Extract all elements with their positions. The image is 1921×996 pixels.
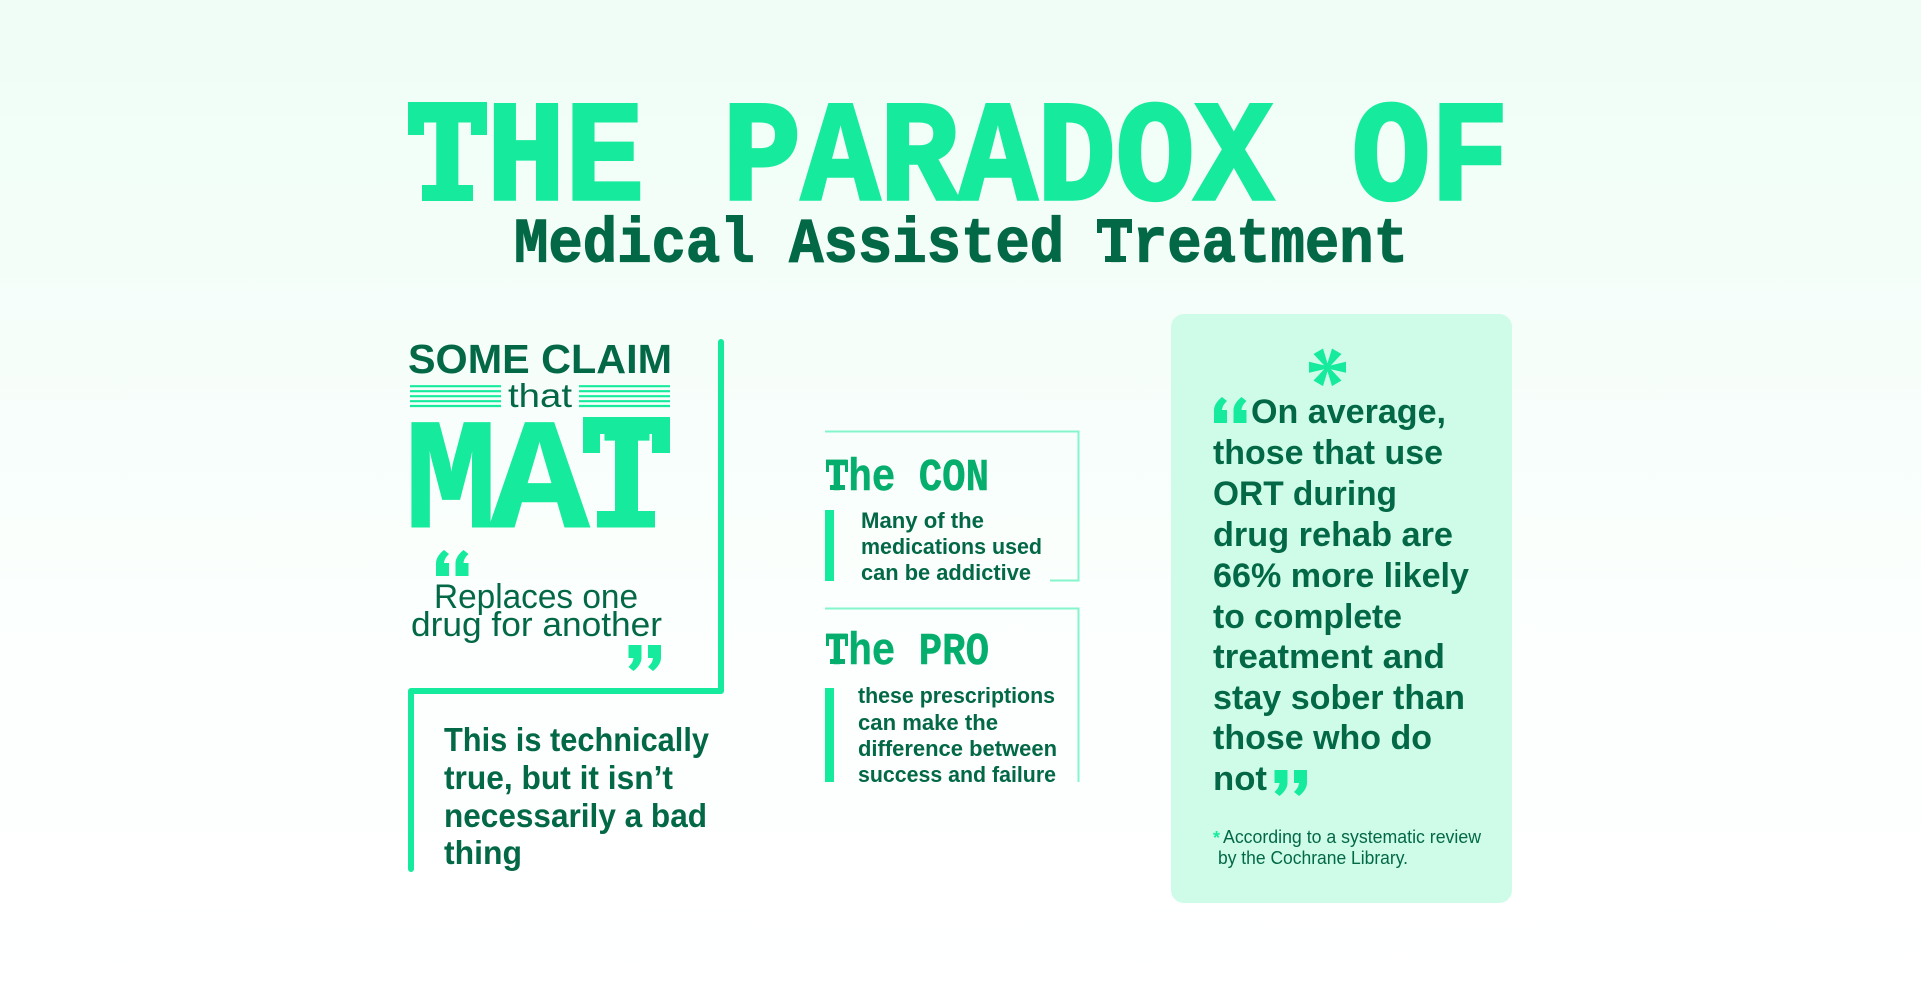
statistic text: 66% more likely bbox=[1213, 557, 1469, 595]
text: con body: medications used bbox=[861, 534, 1042, 559]
accent bar bbox=[825, 688, 834, 782]
statistic text: stay sober than bbox=[1213, 679, 1465, 717]
footnote bbox=[1213, 827, 1482, 868]
footnote: by the Cochrane Library. bbox=[1218, 848, 1408, 868]
icon: closing quote bbox=[1274, 770, 1307, 796]
icon: opening quote bbox=[436, 550, 468, 576]
text: con body: Many of the bbox=[861, 508, 984, 533]
text: that: that bbox=[508, 377, 572, 414]
statistic text: On average, bbox=[1251, 393, 1446, 431]
icon: closing quote bbox=[628, 645, 661, 671]
text: technically true bbox=[444, 721, 710, 871]
accent bar bbox=[825, 510, 834, 581]
text: con body: can be addictive bbox=[861, 560, 1031, 585]
text: con body bbox=[861, 508, 1042, 585]
footnote: According to a systematic review bbox=[1223, 827, 1482, 847]
statistic text: drug rehab are bbox=[1213, 516, 1453, 554]
subtitle: Medical Assisted Treatment bbox=[514, 210, 1408, 280]
frame: pro outline bbox=[825, 608, 1078, 782]
text: technically true: necessarily a bad bbox=[444, 797, 707, 834]
statistic text bbox=[1213, 393, 1469, 798]
footnote: * bbox=[1213, 828, 1220, 848]
statistic text: to complete bbox=[1213, 598, 1402, 636]
icon: opening quote bbox=[1214, 397, 1246, 423]
text: pro body: these prescriptions bbox=[858, 683, 1055, 708]
text: pro body: success and failure bbox=[858, 762, 1056, 787]
text: technically true: thing bbox=[444, 834, 522, 871]
statistic text: those that use bbox=[1213, 434, 1443, 472]
frame: con outline bbox=[825, 432, 1078, 580]
frame: left panel bracket bbox=[411, 342, 721, 869]
icon: asterisk bbox=[1309, 349, 1346, 386]
heading: some claim: SOME CLAIM bbox=[408, 336, 672, 382]
panel: the pro bbox=[825, 608, 1078, 787]
card background bbox=[1171, 314, 1512, 903]
statistic text: those who do bbox=[1213, 719, 1432, 757]
statistic text: not bbox=[1213, 760, 1267, 798]
heading: MAT bbox=[405, 396, 670, 574]
panel: statistic card bbox=[1171, 314, 1512, 903]
stripes: left bbox=[410, 386, 501, 406]
heading: MAT: A bbox=[490, 396, 590, 574]
heading: the pro: The PRO bbox=[825, 627, 989, 678]
text: pro body bbox=[858, 683, 1057, 787]
text: technically true: true, but it isn’t bbox=[444, 759, 673, 796]
quote text: drug for another bbox=[411, 606, 662, 644]
quote text bbox=[411, 578, 662, 644]
heading: MAT: T bbox=[602, 396, 652, 574]
quote text: Replaces one bbox=[434, 578, 638, 616]
text: technically true: This is technically bbox=[444, 721, 710, 758]
panel: the con bbox=[825, 432, 1078, 585]
heading: the con: The CON bbox=[825, 453, 989, 504]
statistic text: ORT during bbox=[1213, 475, 1397, 513]
heading: MAT: M bbox=[405, 396, 497, 574]
text: pro body: can make the bbox=[858, 710, 998, 735]
text: pro body: difference between bbox=[858, 736, 1057, 761]
stripes: right bbox=[579, 386, 670, 406]
panel: some claim bbox=[405, 336, 721, 871]
statistic text: treatment and bbox=[1213, 638, 1445, 676]
title: THE PARADOX OF bbox=[408, 80, 1509, 242]
